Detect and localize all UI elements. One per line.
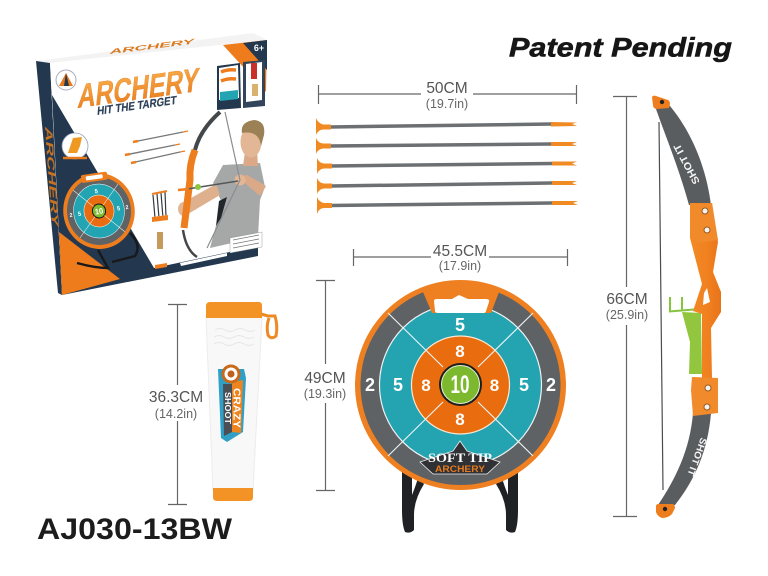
score 5 values: 5 bbox=[393, 375, 403, 395]
quiver bottom cap bbox=[213, 488, 253, 501]
box target bbox=[58, 168, 140, 254]
orange corner top right bbox=[223, 40, 267, 92]
upper limb text: SHOT IT bbox=[672, 142, 703, 186]
navy corner top right bbox=[243, 40, 267, 70]
arrow rest bbox=[669, 297, 694, 312]
arrows bbox=[316, 118, 578, 214]
quiver logo: CRAZY bbox=[230, 388, 242, 428]
score 8 values bbox=[421, 342, 499, 429]
quiver bbox=[206, 302, 277, 501]
score 10: 10 bbox=[450, 371, 470, 399]
arrow 2 bbox=[316, 138, 577, 154]
bullseye bbox=[439, 363, 482, 406]
box arrows bbox=[125, 131, 188, 163]
box stand bbox=[77, 233, 138, 268]
arrow 5 bbox=[317, 197, 578, 214]
heading: patent pending: Patent Pending bbox=[509, 32, 732, 62]
embossed waves bbox=[214, 328, 255, 346]
lower tip bbox=[656, 504, 675, 518]
upper tip bbox=[652, 96, 670, 109]
green grip bbox=[682, 312, 702, 374]
model number: AJ030-13BW bbox=[37, 513, 233, 546]
upper riser plate bbox=[690, 203, 718, 243]
length inches: (19.7in) bbox=[426, 97, 468, 111]
box arrow nocked bbox=[178, 181, 238, 190]
quiver logo: SHOOT bbox=[223, 392, 232, 424]
box bow bbox=[183, 112, 240, 257]
top side title: ARCHERY bbox=[107, 38, 198, 56]
box top side bbox=[36, 33, 267, 63]
box title: ARCHERY bbox=[76, 62, 201, 116]
box quiver bbox=[152, 191, 168, 269]
height label: 49CM bbox=[304, 370, 346, 387]
quiver inches: (14.2in) bbox=[155, 407, 197, 421]
riser window bbox=[703, 288, 710, 305]
soft tip archery badge: SOFT TIP bbox=[428, 451, 492, 465]
box target: 10 bbox=[94, 206, 104, 217]
lower riser plate bbox=[691, 377, 718, 416]
quiver logo bbox=[218, 364, 246, 442]
quiver body bbox=[206, 317, 262, 490]
box target: 2 bbox=[125, 205, 129, 211]
score 2 values: 2 bbox=[365, 375, 375, 395]
box warning label bbox=[230, 232, 262, 253]
box bottom strip bbox=[180, 253, 227, 266]
medal badge bbox=[62, 133, 88, 159]
brand logo bbox=[56, 70, 76, 90]
side title: ARCHERY bbox=[42, 124, 60, 230]
quiver label: 36.3CM bbox=[149, 389, 203, 406]
teal ring bbox=[380, 304, 542, 466]
soft tip archery badge bbox=[420, 441, 500, 474]
box target: 5 bbox=[117, 206, 121, 212]
handle tab bbox=[423, 284, 499, 313]
box subtitle: HIT THE TARGET bbox=[97, 94, 177, 118]
score 2 values: 2 bbox=[546, 375, 556, 395]
score 5 values bbox=[393, 315, 529, 395]
bow label: 66CM bbox=[606, 291, 648, 308]
dimension: quiver height bbox=[149, 304, 203, 504]
orange rim bbox=[355, 280, 566, 490]
score 8 values: 8 bbox=[421, 376, 431, 395]
quiver top cap bbox=[206, 302, 262, 318]
dimension: arrow length bbox=[318, 80, 576, 111]
handle hole bbox=[434, 295, 489, 313]
navy triangle bbox=[52, 95, 258, 295]
arrow 1 bbox=[316, 118, 577, 135]
bow string bbox=[659, 122, 663, 490]
carabiner bbox=[261, 314, 277, 338]
dimension: bow height bbox=[606, 96, 648, 516]
orange ring bbox=[412, 336, 510, 434]
gray ring bbox=[360, 285, 560, 485]
dimension: target width bbox=[354, 243, 568, 273]
dimension: target height bbox=[304, 280, 346, 490]
soft tip archery badge: ARCHERY bbox=[435, 464, 485, 474]
arrow 3 bbox=[317, 158, 577, 174]
score 2 values bbox=[365, 375, 556, 395]
score 5 values: 5 bbox=[455, 315, 465, 335]
mini panels bbox=[217, 60, 265, 110]
score 8 values: 8 bbox=[455, 342, 465, 361]
box target: 5 bbox=[78, 211, 82, 218]
length label: 50CM bbox=[426, 80, 468, 97]
height inches: (19.3in) bbox=[304, 387, 346, 401]
riser bbox=[690, 203, 721, 378]
green center bbox=[442, 366, 480, 404]
arrow 4 bbox=[317, 178, 577, 194]
bow inches: (25.9in) bbox=[606, 308, 648, 322]
man bbox=[178, 120, 266, 248]
width label: 45.5CM bbox=[433, 243, 487, 260]
score 8 values: 8 bbox=[455, 410, 465, 429]
target stand bbox=[402, 470, 518, 533]
age label: 6+ bbox=[254, 43, 264, 53]
orange corner bottom left bbox=[59, 232, 120, 295]
box side panel bbox=[36, 61, 62, 295]
box front face bbox=[50, 40, 267, 295]
target board bbox=[355, 280, 566, 490]
score 5 values: 5 bbox=[519, 375, 529, 395]
left leg bbox=[402, 470, 424, 533]
box target: 2 bbox=[69, 213, 73, 219]
bow bbox=[652, 96, 721, 518]
lower limb text: SHOT IT bbox=[684, 436, 709, 478]
product box bbox=[36, 33, 267, 295]
lower limb bbox=[658, 413, 711, 505]
dividers bbox=[388, 313, 533, 456]
score 8 values: 8 bbox=[490, 376, 499, 395]
upper limb bbox=[655, 106, 711, 205]
width inches: (17.9in) bbox=[439, 259, 481, 273]
right leg bbox=[496, 470, 518, 533]
box target: 5 bbox=[94, 189, 99, 195]
